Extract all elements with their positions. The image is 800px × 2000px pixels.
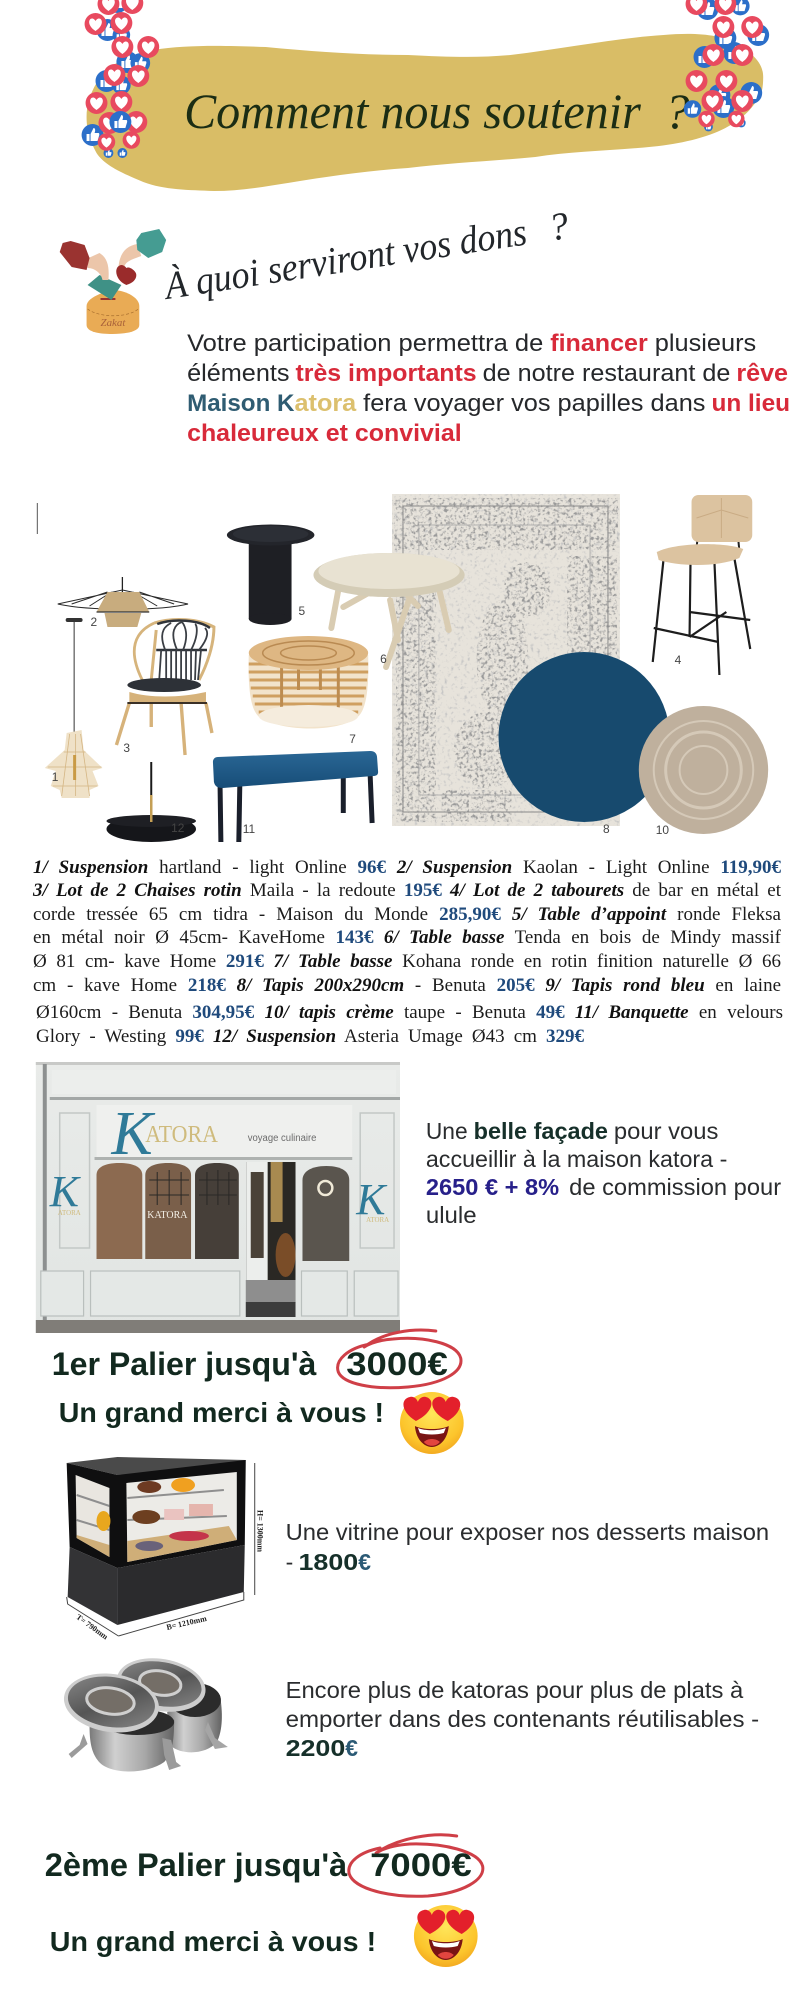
title text: Comment nous soutenir	[184, 84, 641, 139]
furniture numbers: 2	[91, 615, 98, 629]
furniture numbers: 4	[675, 653, 682, 667]
text block: participation: éléments	[187, 360, 290, 387]
text block: containers: 2200	[286, 1735, 345, 1761]
furniture numbers: 5	[299, 604, 305, 618]
text block: containers: Encore plus de katoras pour plus de plats à	[286, 1677, 744, 1703]
sign: Katora logo	[49, 1100, 389, 1224]
back container	[113, 1652, 228, 1752]
title question mark: ?	[665, 84, 690, 139]
furniture numbers: 7	[349, 732, 356, 746]
rattan table	[249, 636, 368, 728]
text block: participation: atora	[295, 390, 357, 417]
text block: price list: 1/ Suspension hartland - light Online 96€ 2/ Suspension Kaolan - Light Online 119,90€	[33, 857, 781, 878]
black pendant 12	[106, 762, 196, 842]
heading: palier 2: 2ème Palier jusqu'à	[45, 1847, 348, 1883]
heading: palier 1: 3000€	[346, 1346, 448, 1382]
red hand-drawn circle	[349, 1835, 483, 1896]
title banner	[87, 34, 763, 191]
text block: vitrine: Une vitrine pour exposer nos desserts maison	[286, 1519, 769, 1545]
icon: donation box with hands	[60, 229, 166, 334]
moodboard: furniture	[37, 494, 768, 842]
shop windows	[97, 1163, 349, 1261]
text block: participation: chaleureux et convivial	[187, 420, 462, 447]
image: pastry display case	[67, 1457, 265, 1642]
thank-you line 1: Un grand merci à vous !	[59, 1397, 384, 1428]
bench	[213, 751, 378, 842]
furniture numbers: 8	[603, 822, 610, 836]
text block: price list: Glory - Westing 99€ 12/ Suspension Asteria Umage Ø43 cm 329€	[36, 1026, 584, 1047]
text block: vitrine: -	[286, 1549, 293, 1575]
text block: facade: Une	[426, 1118, 468, 1144]
heading: palier 1	[52, 1330, 461, 1388]
text block: vitrine: €	[358, 1549, 371, 1575]
text block: facade: belle façade	[474, 1118, 608, 1144]
sign: Katora logo: ATORA	[366, 1216, 389, 1224]
text block: participation: de notre restaurant de	[483, 360, 730, 387]
furniture numbers: 10	[656, 823, 669, 837]
text block: price list: 3/ Lot de 2 Chaises rotin Maila - la redoute 195€ 4/ Lot de 2 tabourets de bar en métal et	[33, 880, 781, 901]
furniture numbers: 3	[123, 741, 130, 755]
text block: facade	[426, 1118, 781, 1228]
icons: left reactions cluster	[82, 0, 159, 158]
text block: facade: 2650 € + 8%	[426, 1174, 559, 1200]
icons: right reactions cluster	[684, 0, 769, 131]
sign: Katora logo: voyage culinaire	[248, 1133, 317, 1144]
shop door	[246, 1162, 296, 1317]
heading: palier 2	[45, 1835, 483, 1896]
sign: Katora logo: K	[355, 1176, 388, 1224]
rattan chair	[116, 620, 214, 755]
dimension labels	[74, 1510, 265, 1642]
dimension labels: B= 1210mm	[166, 1614, 208, 1632]
sign: Katora logo: K	[49, 1168, 82, 1216]
text block: price list: en métal noir Ø 45cm- KaveHome 143€ 6/ Table basse Tenda en bois de Mindy massif	[33, 927, 781, 948]
text block: participation: Votre participation permettra de	[187, 330, 543, 357]
coffee table Tenda	[313, 553, 465, 667]
sign: Katora logo: K	[110, 1100, 155, 1168]
text block: participation: Maison K	[187, 390, 295, 417]
text block: facade: accueillir à la maison katora -	[426, 1146, 727, 1172]
text block: price list: corde tressée 65 cm tidra - Maison du Monde 285,90€ 5/ Table d’appoint ronde Fleksa	[33, 904, 781, 925]
text block: participation: financer	[550, 330, 648, 357]
sign: Katora logo: KATORA	[147, 1210, 188, 1221]
sign: Katora logo: ATORA	[145, 1122, 219, 1148]
text block: participation: un lieu	[711, 390, 790, 417]
text block: vitrine	[286, 1519, 769, 1575]
text block: price list: cm - kave Home 218€ 8/ Tapis 200x290cm - Benuta 205€ 9/ Tapis rond bleu en laine	[33, 975, 781, 996]
furniture numbers	[52, 604, 682, 837]
text block: participation: plusieurs	[655, 330, 756, 357]
thank-you line 2: Un grand merci à vous !	[50, 1926, 376, 1957]
sign: Katora logo: ATORA	[58, 1209, 81, 1217]
photo: Katora facade	[36, 1062, 400, 1333]
carpet: vintage grey rug	[392, 494, 620, 826]
emoji: heart eyes 2	[414, 1905, 478, 1967]
front container	[60, 1668, 181, 1772]
side table	[227, 524, 314, 625]
dimension labels: H= 1300mm	[256, 1510, 265, 1552]
base panels	[41, 1271, 398, 1316]
icon: donation box with hands: Zakat	[100, 317, 126, 329]
pendant lamp 1	[45, 618, 102, 798]
furniture numbers: 6	[380, 652, 387, 666]
heading: à quoi serviront vos dons: À quoi serviront vos dons	[159, 210, 530, 308]
emoji: heart eyes 1	[400, 1392, 464, 1454]
text block: containers: €	[345, 1735, 358, 1761]
furniture numbers: 1	[52, 770, 59, 784]
heading: palier 1: 1er Palier jusqu'à	[52, 1346, 317, 1382]
heading: à quoi serviront vos dons: ?	[546, 204, 572, 250]
dimension labels: T= 790mm	[74, 1612, 110, 1642]
text block: facade: ulule	[426, 1202, 477, 1228]
image: stainless steel containers	[60, 1652, 228, 1772]
furniture numbers: 12	[171, 821, 185, 835]
text block: price list	[32, 857, 783, 1047]
text block: containers	[286, 1677, 759, 1761]
text block: price list: Ø 81 cm- kave Home 291€ 7/ Table basse Kohana ronde en rotin finition naturelle Ø 66	[33, 951, 781, 972]
text block: facade: pour vous	[614, 1118, 718, 1144]
pendant lamp 2	[58, 577, 188, 627]
text block: vitrine: 1800	[299, 1549, 358, 1575]
text block: participation: rêve	[736, 360, 788, 387]
text block: participation	[187, 330, 790, 447]
red hand-drawn circle	[338, 1330, 461, 1388]
carpet: navy round rug	[499, 652, 670, 822]
text block: participation: fera voyager vos papilles dans	[363, 390, 706, 417]
text block: participation: très importants	[296, 360, 477, 387]
text block: containers: emporter dans des contenants réutilisables -	[286, 1706, 759, 1732]
bar stool	[653, 495, 752, 675]
text block: price list: Ø160cm - Benuta 304,95€ 10/ tapis crème taupe - Benuta 49€ 11/ Banquette en velours	[36, 1002, 783, 1023]
banner blob	[87, 34, 763, 191]
carpet: taupe round rug	[639, 706, 768, 834]
text block: facade: de commission pour	[569, 1174, 781, 1200]
furniture numbers: 11	[243, 822, 256, 836]
heading: palier 2: 7000€	[370, 1847, 472, 1883]
